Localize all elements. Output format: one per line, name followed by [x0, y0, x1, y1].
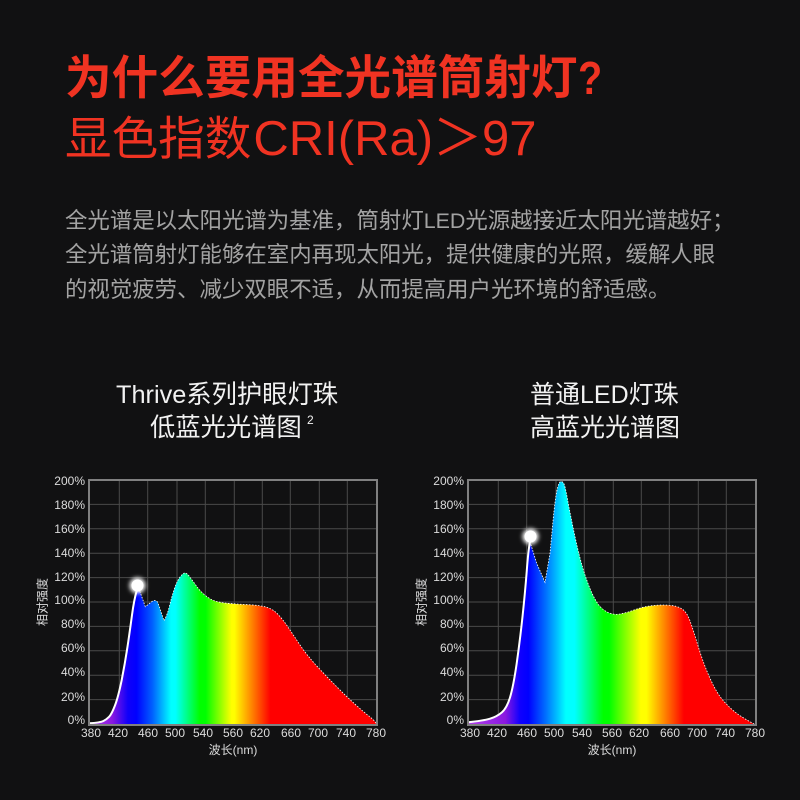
white rising edge — [468, 542, 530, 722]
dashed outline — [137, 573, 377, 725]
x axis labels: 780 — [366, 726, 386, 740]
x axis labels: 420 — [487, 726, 507, 740]
x axis labels: 620 — [250, 726, 270, 740]
x axis title: 波长(nm) — [588, 743, 636, 757]
y axis labels: 120% — [433, 570, 464, 584]
y axis labels: 80% — [440, 617, 464, 631]
title — [65, 52, 602, 166]
y axis labels: 60% — [61, 641, 85, 655]
y axis labels: 120% — [54, 570, 85, 584]
x axis labels: 660 — [281, 726, 301, 740]
y axis labels — [433, 474, 464, 727]
x axis labels: 560 — [602, 726, 622, 740]
y axis labels: 140% — [54, 546, 85, 560]
x axis labels: 700 — [687, 726, 707, 740]
frame — [89, 480, 377, 725]
y axis labels: 180% — [433, 498, 464, 512]
title line 2: 显色指数CRI(Ra)＞97 — [65, 112, 537, 166]
y axis labels: 40% — [440, 665, 464, 679]
y axis title: 相对强度 — [34, 578, 50, 626]
y axis labels: 100% — [54, 593, 85, 607]
grid — [468, 480, 756, 725]
chart heading: standard LED — [530, 381, 680, 442]
chart heading: Thrive — [116, 381, 338, 442]
x axis labels: 380 — [81, 726, 101, 740]
dashed outline — [530, 482, 756, 725]
x axis labels: 740 — [715, 726, 735, 740]
x axis labels: 460 — [138, 726, 158, 740]
chart: Thrive low blue spectrum — [34, 474, 386, 757]
x axis labels: 380 — [460, 726, 480, 740]
frame — [468, 480, 756, 725]
x axis labels: 560 — [223, 726, 243, 740]
x axis labels: 460 — [517, 726, 537, 740]
title line 1: ? — [578, 52, 602, 104]
title line 1: 为什么要用全光谱筒射灯 — [65, 52, 578, 104]
chart heading: standard LED: 普通LED灯珠 — [530, 381, 679, 409]
y axis labels — [54, 474, 85, 727]
y axis labels: 160% — [54, 522, 85, 536]
chart heading: Thrive: 2 — [307, 413, 314, 427]
chart heading: Thrive: 低蓝光光谱图 — [150, 414, 302, 442]
peak marker — [522, 528, 538, 544]
intro text block: 全光谱是以太阳光谱为基准，筒射灯LED光源越接近太阳光谱越好； — [65, 208, 734, 232]
y axis labels: 20% — [440, 690, 464, 704]
y axis labels: 160% — [433, 522, 464, 536]
x axis labels: 660 — [660, 726, 680, 740]
x axis labels: 500 — [165, 726, 185, 740]
y axis labels: 0% — [447, 713, 464, 727]
x axis labels: 540 — [572, 726, 592, 740]
chart heading: Thrive: Thrive系列护眼灯珠 — [116, 381, 338, 409]
x axis title: 波长(nm) — [209, 743, 257, 757]
y axis labels: 60% — [440, 641, 464, 655]
intro text block: 全光谱筒射灯能够在室内再现太阳光，提供健康的光照，缓解人眼 — [65, 242, 715, 267]
y axis labels: 200% — [54, 474, 85, 488]
x axis labels — [460, 726, 765, 740]
y axis labels: 20% — [61, 690, 85, 704]
y axis labels: 100% — [433, 593, 464, 607]
x axis labels: 540 — [193, 726, 213, 740]
x axis labels: 620 — [629, 726, 649, 740]
white rising edge — [89, 591, 137, 723]
y axis title: 相对强度 — [414, 578, 428, 626]
y axis labels: 200% — [433, 474, 464, 488]
y axis labels: 80% — [61, 617, 85, 631]
y axis labels: 180% — [54, 498, 85, 512]
intro text block — [65, 208, 734, 302]
peak marker — [130, 578, 146, 594]
x axis labels: 420 — [108, 726, 128, 740]
x axis labels: 700 — [308, 726, 328, 740]
y axis labels: 40% — [61, 665, 85, 679]
intro text block: 的视觉疲劳、减少双眼不适，从而提高用户光环境的舒适感。 — [65, 276, 670, 302]
spectrum area — [468, 482, 756, 725]
grid — [89, 480, 377, 725]
chart: standard LED high blue spectrum — [414, 474, 765, 757]
spectrum area — [89, 573, 377, 725]
x axis labels — [81, 726, 386, 740]
chart heading: standard LED: 高蓝光光谱图 — [530, 414, 680, 442]
x axis labels: 740 — [336, 726, 356, 740]
x axis labels: 500 — [544, 726, 564, 740]
x axis labels: 780 — [745, 726, 765, 740]
y axis labels: 140% — [433, 546, 464, 560]
y axis labels: 0% — [68, 713, 85, 727]
